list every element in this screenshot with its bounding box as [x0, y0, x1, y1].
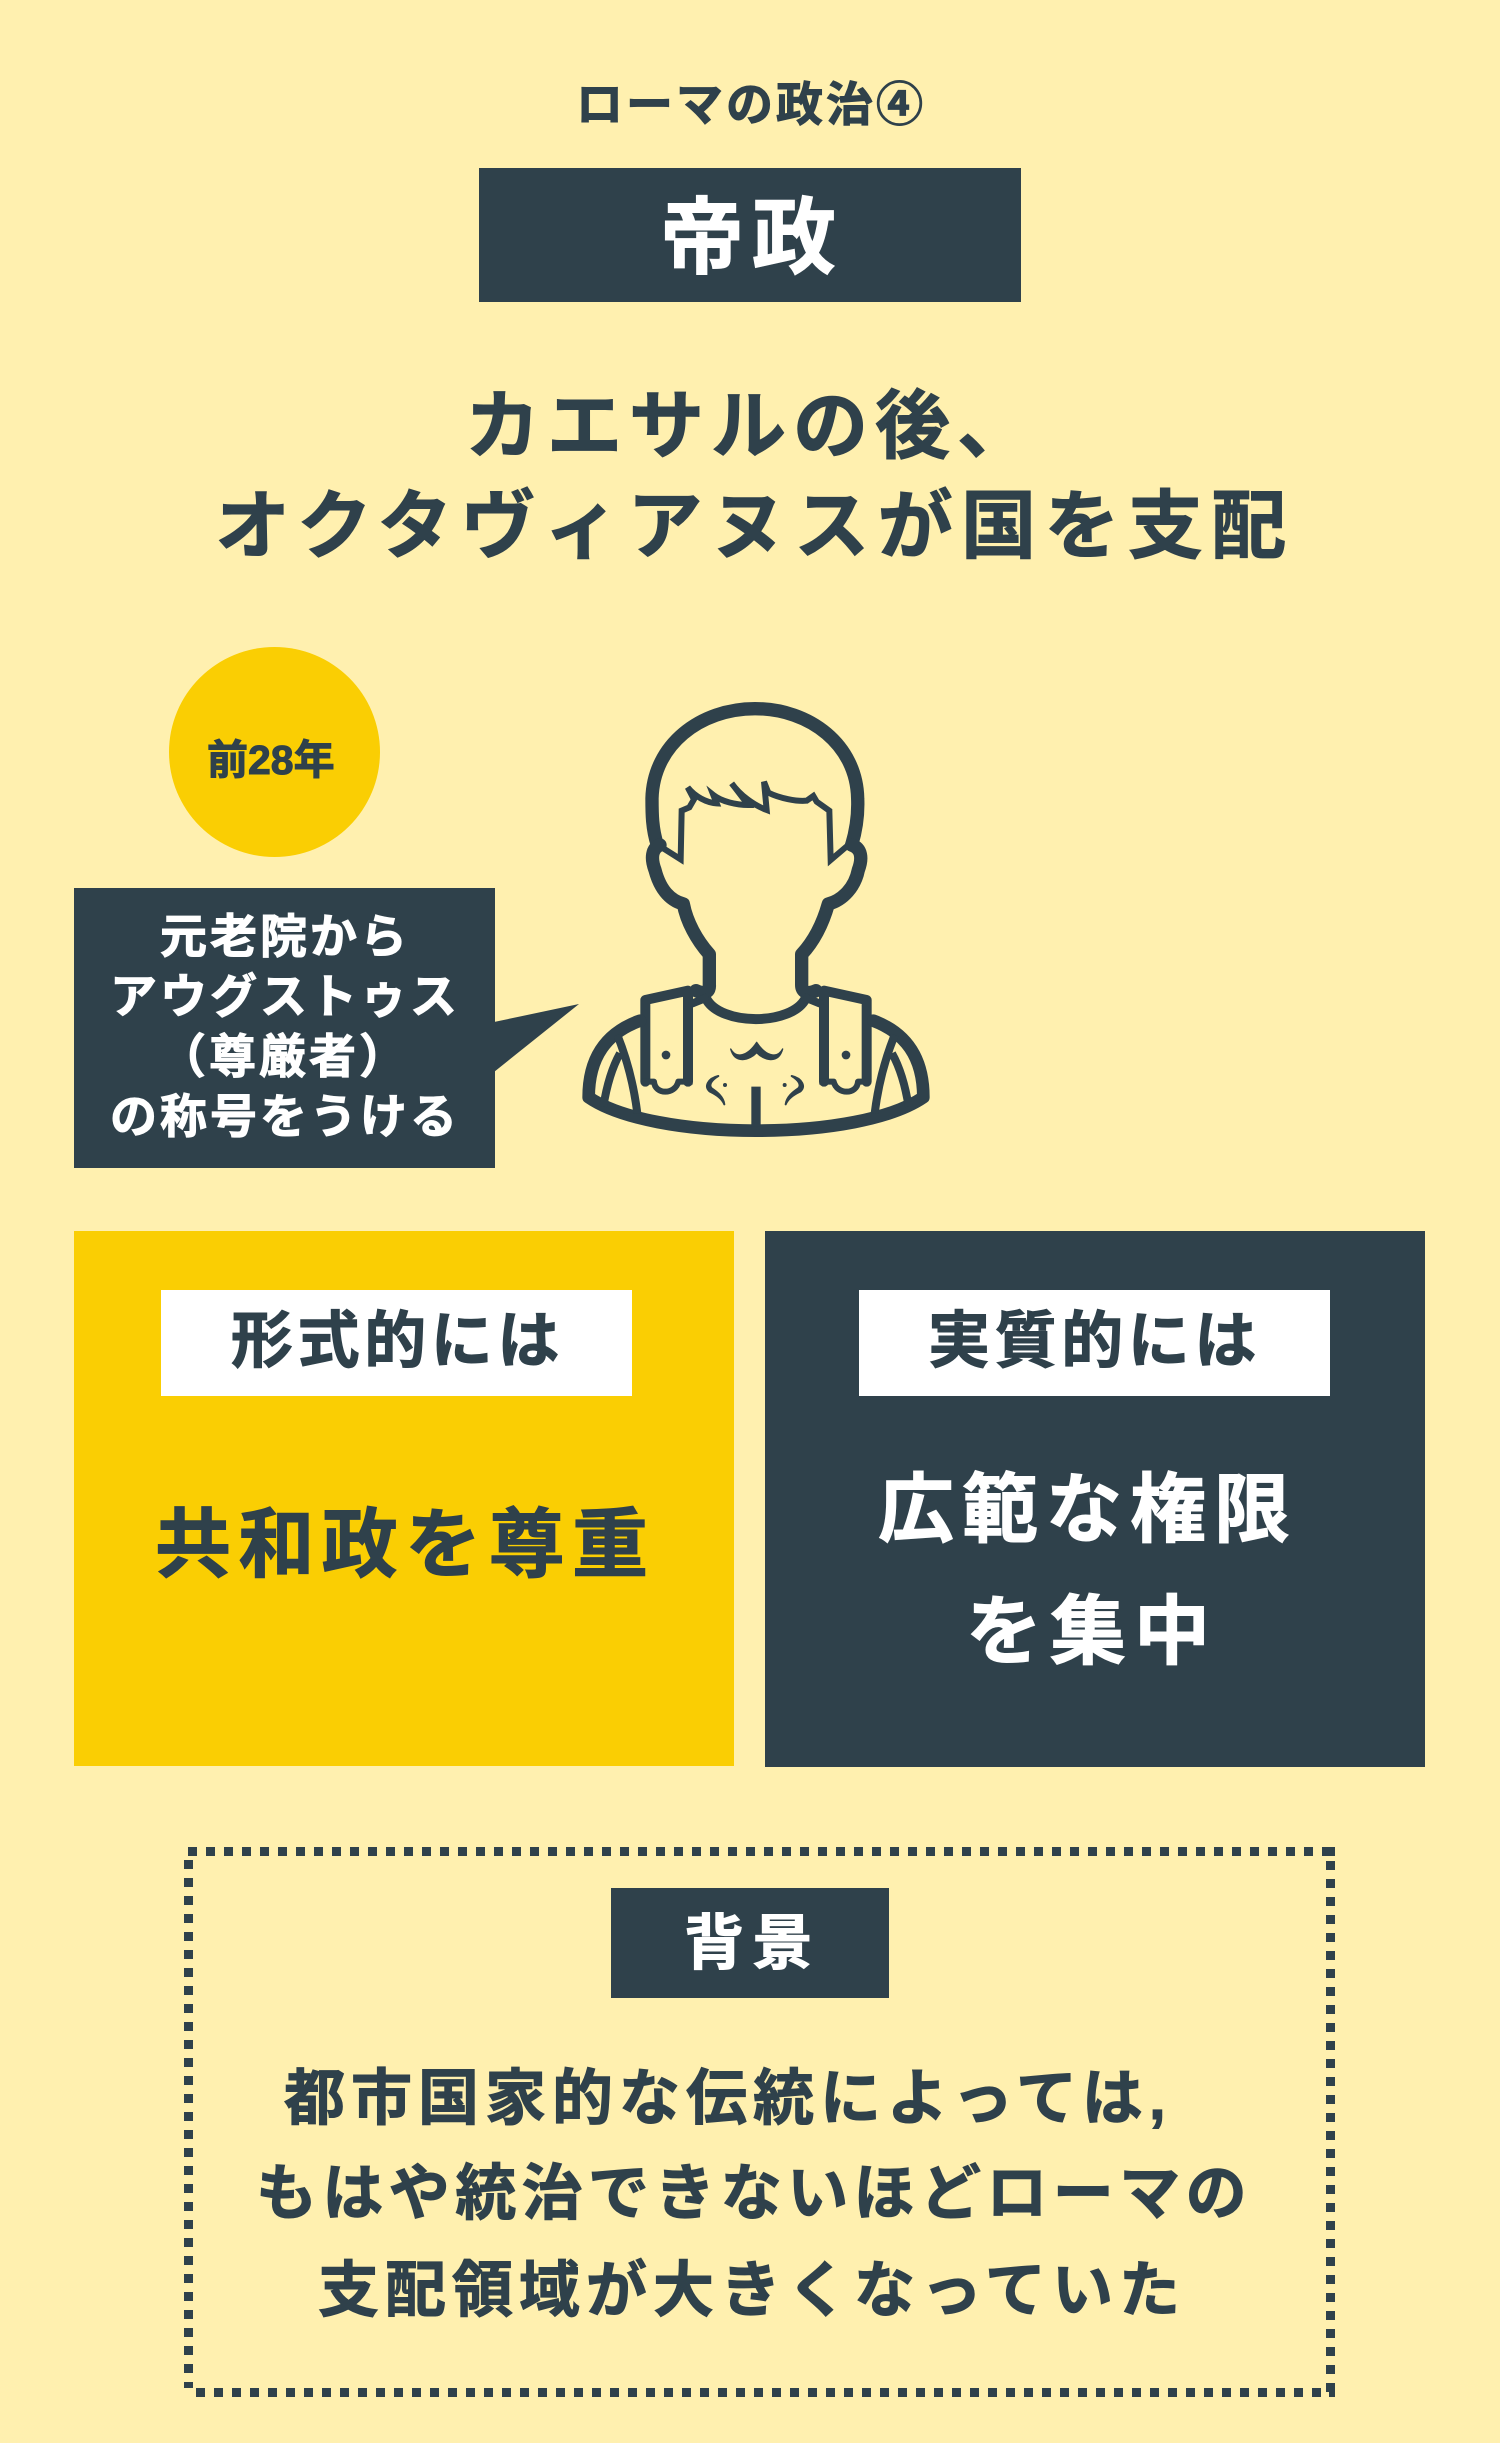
- headline line 2: オクタヴィアヌスが国を支配: [215, 484, 1295, 568]
- collar: [706, 998, 806, 1019]
- chest dots: [723, 1083, 787, 1087]
- label text: formally: 形式的には: [231, 1307, 564, 1376]
- background label text: 背景: [684, 1910, 821, 1977]
- year badge: [169, 647, 380, 857]
- right chest curl: [786, 1076, 803, 1104]
- bubble text line 2: アウグストゥス: [110, 970, 460, 1023]
- fringe: [662, 782, 848, 860]
- bubble text line 3: （尊厳者）: [159, 1030, 409, 1083]
- label box: in substance: [859, 1290, 1330, 1396]
- body text line 1: 都市国家的な伝統によっては,: [284, 2064, 1172, 2132]
- year text: 前28年: [207, 737, 335, 783]
- chest ornament: [731, 1042, 783, 1060]
- title text: 帝政: [660, 191, 844, 285]
- hair outline: [652, 709, 858, 845]
- background label box: [611, 1888, 889, 1998]
- bubble box: [74, 888, 495, 1168]
- left sleeve stripes: [603, 1035, 637, 1113]
- face and neck: [652, 845, 709, 993]
- icon: Roman man bust: [582, 702, 930, 1137]
- bubble tail: [495, 1004, 579, 1072]
- left strap: [642, 991, 705, 1092]
- panel: formally: [74, 1231, 734, 1766]
- label box: formally: [161, 1290, 632, 1396]
- headline: [215, 384, 1295, 568]
- right strap: [807, 991, 870, 1092]
- left chest curl: [707, 1076, 724, 1104]
- label text: in substance: 実質的には: [928, 1307, 1261, 1376]
- bubble text line 1: 元老院から: [160, 910, 410, 963]
- panel text line 1: in substance: 広範な権限: [878, 1468, 1298, 1553]
- speech bubble: [74, 888, 579, 1168]
- bubble text line 4: の称号をうける: [110, 1090, 460, 1143]
- body text line 3: 支配領域が大きくなっていた: [318, 2256, 1186, 2324]
- panel: background (dotted frame): [184, 1847, 1335, 2397]
- torso: [589, 1021, 923, 1131]
- title box: [479, 168, 1021, 302]
- panel: in substance: [765, 1231, 1425, 1767]
- right face and neck: [802, 845, 861, 993]
- body text line 2: もはや統治できないほどローマの: [256, 2159, 1252, 2227]
- panel text line 2: in substance: を集中: [966, 1590, 1218, 1675]
- chest line: [742, 1087, 770, 1127]
- headline line 1: カエサルの後、: [465, 384, 1039, 468]
- right sleeve stripes: [875, 1035, 909, 1113]
- subtitle: ローマの政治④: [576, 78, 926, 131]
- panel text: formally: 共和政を尊重: [155, 1503, 655, 1588]
- dotted border: [184, 1847, 1335, 2397]
